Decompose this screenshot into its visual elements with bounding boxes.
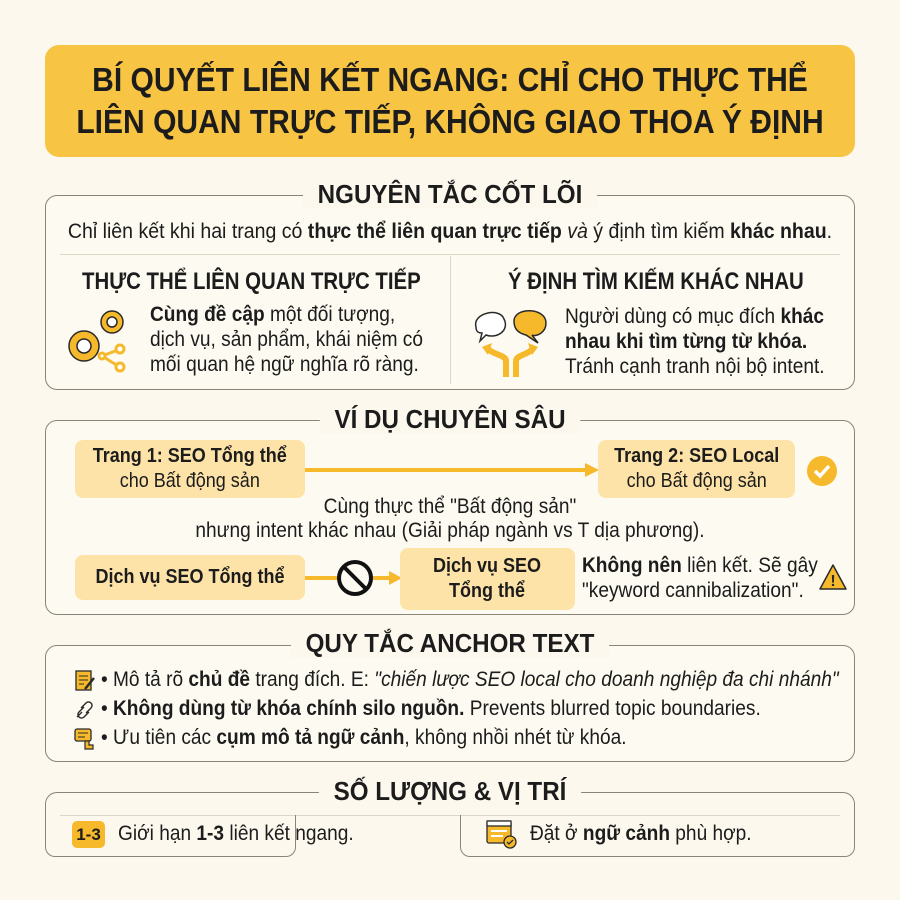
box: trang 2: Trang 2: SEO Local — [614, 445, 779, 467]
heading: ví dụ: VÍ DỤ CHUYÊN SÂU — [334, 404, 566, 434]
box: trang 1 — [75, 440, 305, 498]
panel: ví dụ chuyên sâu — [45, 420, 855, 615]
badge 1-3 — [72, 821, 105, 848]
text: explanation: nhưng intent khác nhau (Giải pháp ngành vs T dịa phương). — [195, 519, 705, 542]
text: thực thể: Cùng đề cập một đối tượng, — [150, 303, 395, 326]
text: warning — [582, 554, 818, 602]
icon: browser check — [486, 820, 517, 849]
text: vị trí: Đặt ở ngữ cảnh phù hợp. — [530, 822, 752, 845]
text: thực thể: mối quan hệ ngữ nghĩa rõ ràng. — [150, 353, 419, 376]
icon: check — [807, 456, 837, 486]
subheading: ý định: Ý ĐỊNH TÌM KIẾM KHÁC NHAU — [508, 268, 804, 295]
box: dịch vụ 1: Dịch vụ SEO Tổng thể — [95, 566, 284, 588]
title banner — [45, 45, 855, 157]
text: ý định: Tránh cạnh tranh nội bộ intent. — [565, 355, 825, 378]
box: dịch vụ 2: Dịch vụ SEO — [433, 555, 542, 577]
icon: speech bubbles with arrows — [474, 310, 547, 377]
text: explanation: Cùng thực thể "Bất động sản" — [324, 495, 576, 518]
heading: số lượng: SỐ LƯỢNG & VỊ TRÍ — [334, 776, 566, 806]
panel: nguyên tắc cốt lõi — [45, 195, 855, 390]
icon: link — [76, 701, 93, 719]
cell: giới hạn — [45, 815, 296, 857]
box: dịch vụ 1 — [75, 555, 305, 600]
panel: số lượng & vị trí — [45, 792, 855, 816]
arrow with no-symbol — [305, 560, 400, 596]
box: trang 2 — [598, 440, 795, 498]
box: trang 1: cho Bất động sản — [120, 470, 260, 492]
text: ý định — [565, 305, 825, 378]
heading: nguyên tắc cốt lõi: NGUYÊN TẮC CỐT LÕI — [318, 179, 582, 209]
icon: chat hand — [74, 728, 94, 750]
rule 2: • Không dùng từ khóa chính silo nguồn. Prevents blurred topic boundaries. — [101, 697, 761, 720]
text: ý định: Người dùng có mục đích khác — [565, 305, 824, 328]
text: thực thể: dịch vụ, sản phẩm, khái niệm có — [150, 328, 423, 351]
badge 1-3: 1-3 — [76, 825, 101, 844]
box: dịch vụ 2 — [400, 548, 575, 610]
text: explanation — [195, 495, 705, 542]
text: giới hạn: Giới hạn 1-3 liên kết ngang. — [118, 822, 354, 845]
text: warning: "keyword cannibalization". — [582, 579, 804, 602]
panel: anchor text — [45, 645, 855, 762]
box: trang 2: cho Bất động sản — [626, 470, 767, 492]
icon: gears — [68, 310, 126, 372]
box: dịch vụ 2: Tổng thể — [450, 580, 525, 602]
arrow: trang1 to trang2 — [305, 463, 598, 477]
text: ý định: nhau khi tìm từng từ khóa. — [565, 330, 807, 353]
icon: edit — [75, 670, 95, 691]
rule 1: • Mô tả rõ chủ đề trang đích. E: "chiến lược SEO local cho doanh nghiệp đa chi nhánh" — [101, 668, 839, 691]
cell: vị trí — [460, 815, 855, 857]
text: warning: Không nên liên kết. Sẽ gây — [582, 554, 818, 577]
title banner: BÍ QUYẾT LIÊN KẾT NGANG: CHỈ CHO THỰC THỂ — [92, 61, 808, 98]
box: trang 1: Trang 1: SEO Tổng thể — [93, 445, 287, 467]
intro text: Chỉ liên kết khi hai trang có thực thể liên quan trực tiếp và ý định tìm kiếm khác nhau. — [68, 220, 832, 243]
heading: anchor: QUY TẮC ANCHOR TEXT — [306, 628, 594, 658]
title banner: LIÊN QUAN TRỰC TIẾP, KHÔNG GIAO THOA Ý ĐỊNH — [76, 103, 824, 140]
text: thực thể — [150, 303, 423, 376]
rule 3: • Ưu tiên các cụm mô tả ngữ cảnh, không nhồi nhét từ khóa. — [101, 726, 627, 749]
icon: warning — [819, 564, 847, 590]
subheading: thực thể: THỰC THỂ LIÊN QUAN TRỰC TIẾP — [82, 268, 421, 295]
icon: warning: ! — [830, 573, 836, 590]
